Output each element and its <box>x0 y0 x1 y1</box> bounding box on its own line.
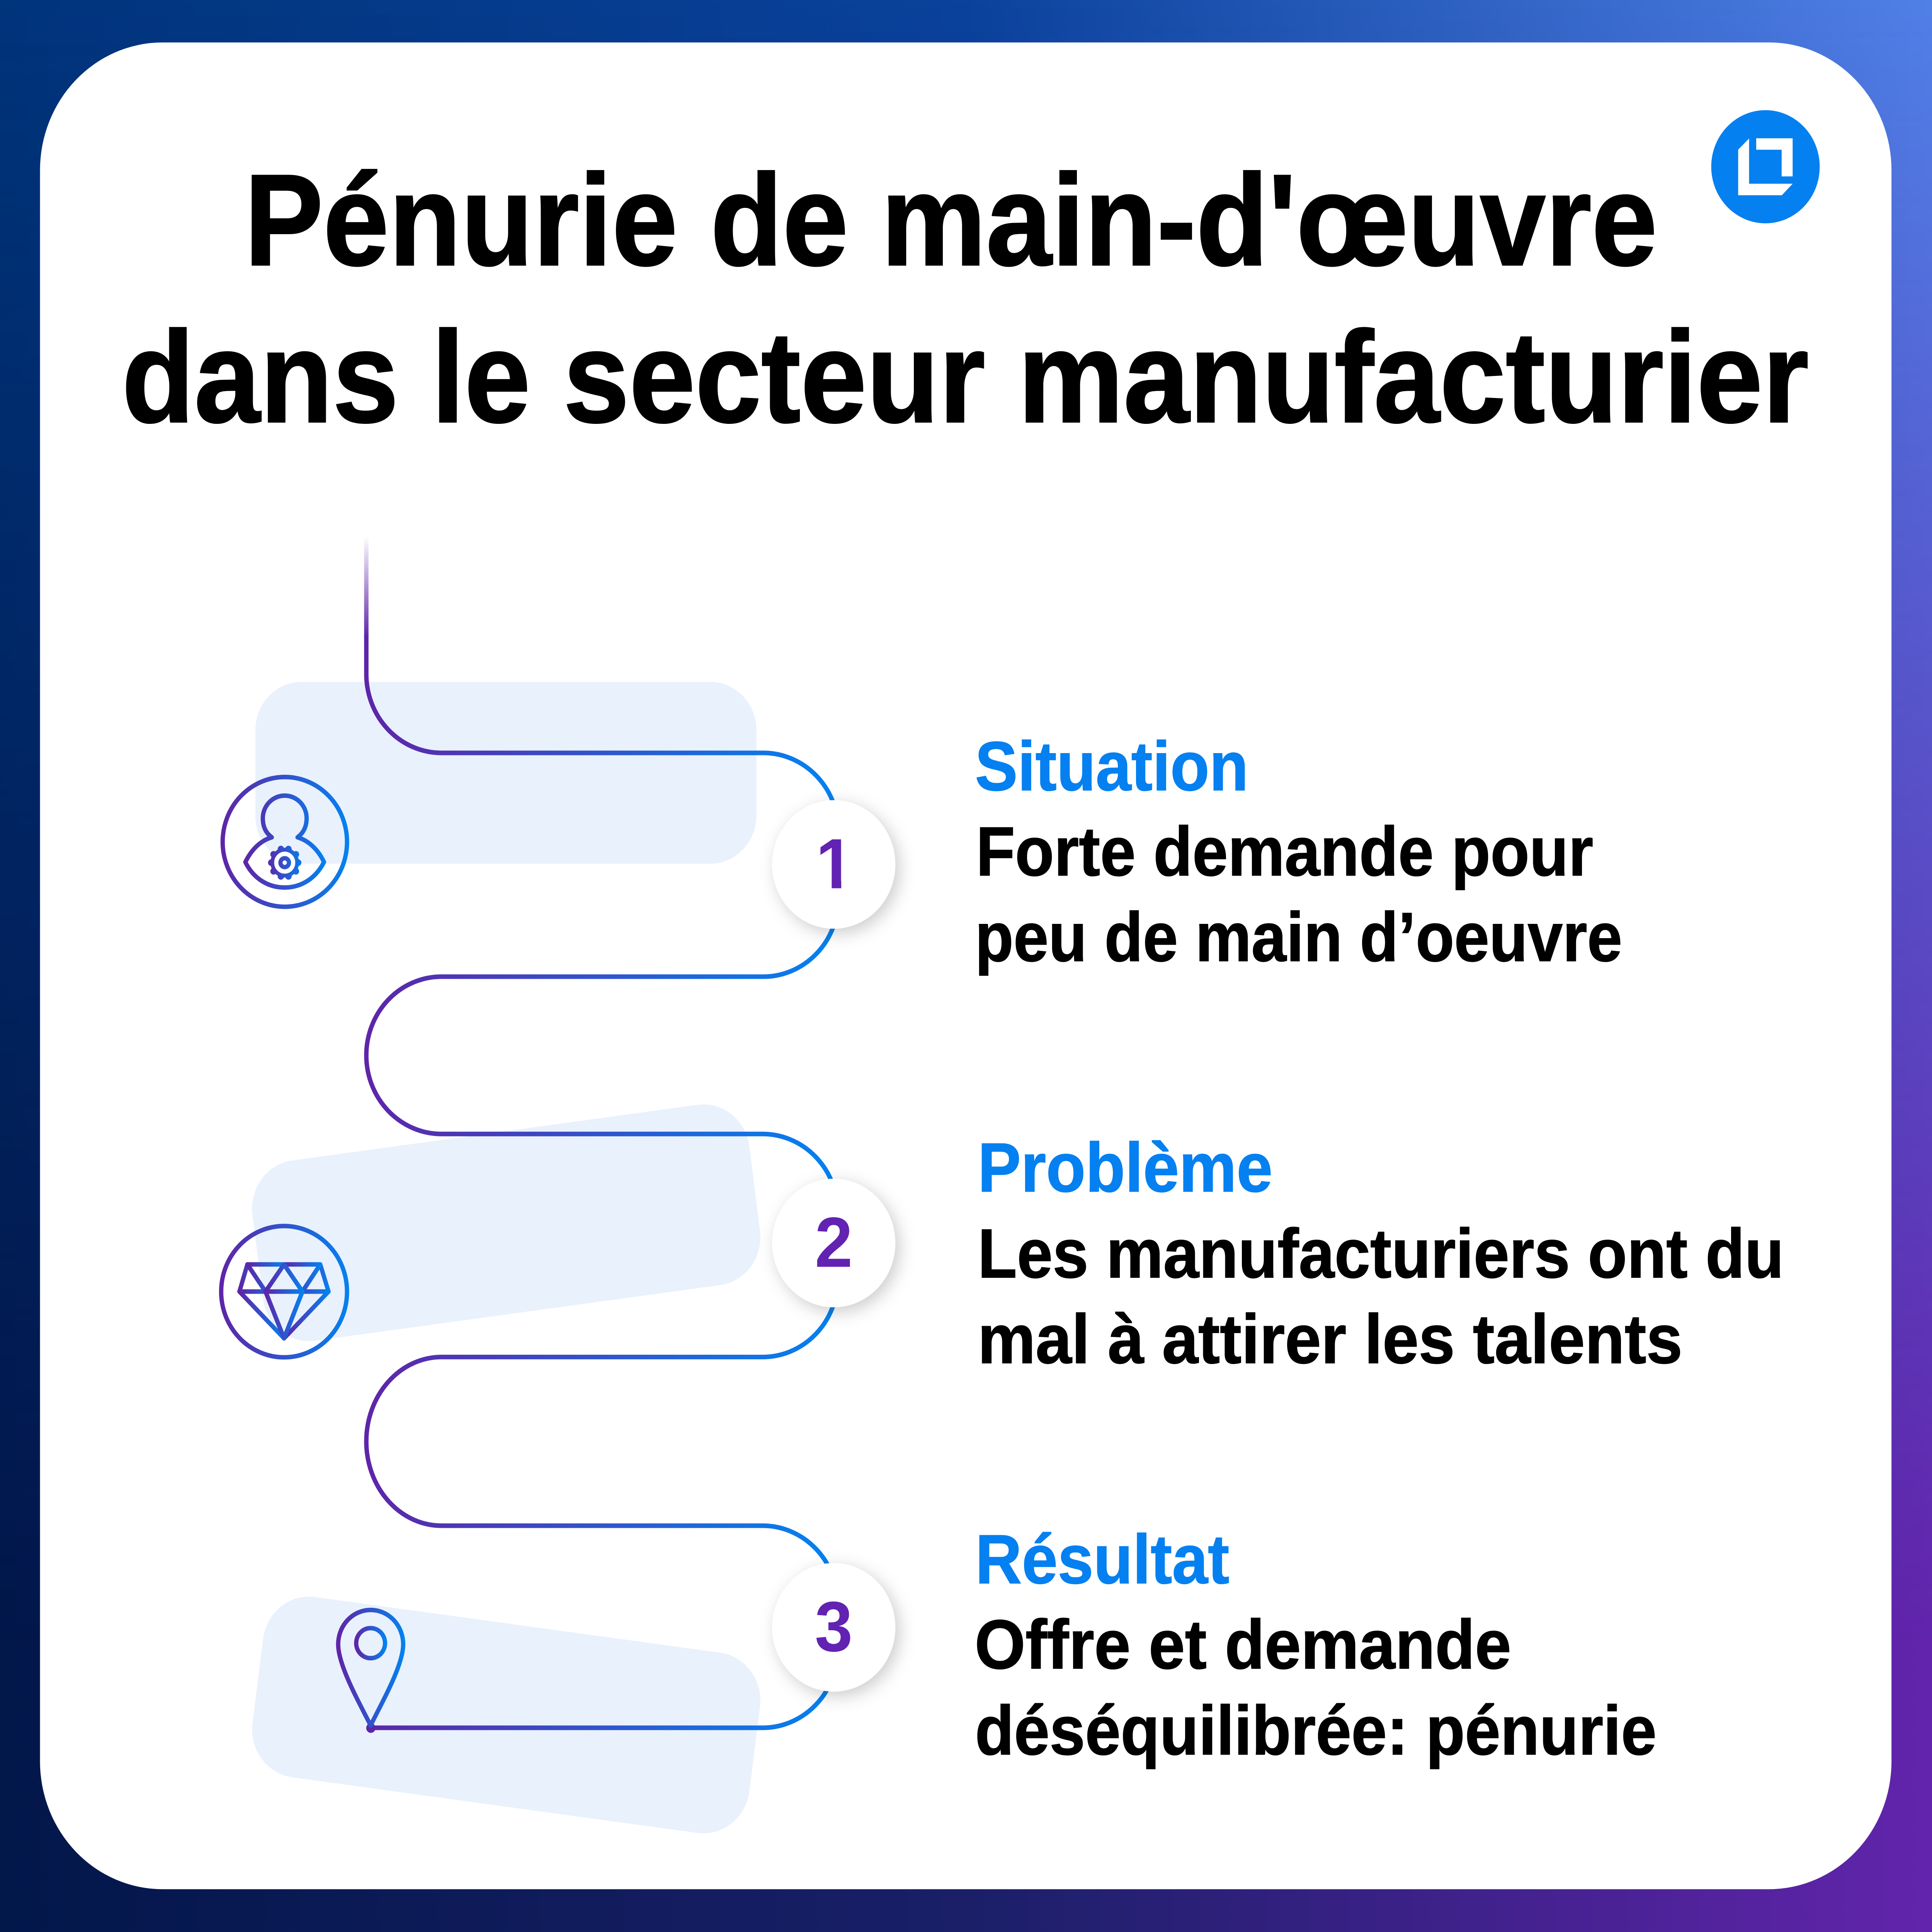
text block: problem <box>978 1129 1784 1378</box>
text block: situation: Forte demande pour <box>976 813 1593 890</box>
panel: situation backdrop <box>255 682 757 864</box>
number badge 1 <box>772 800 895 929</box>
number badge 1: 1 <box>816 824 854 904</box>
number badge 3 <box>772 1563 895 1692</box>
text block: situation <box>975 728 1622 976</box>
icon: person with eye and gear <box>223 777 347 907</box>
text block: problem: Les manufacturiers ont du <box>978 1215 1784 1293</box>
text block: result: Résultat <box>975 1520 1229 1598</box>
icon: map pin <box>338 1610 403 1733</box>
logo badge <box>1711 110 1820 223</box>
text block: situation: Situation <box>975 728 1248 805</box>
text block: problem: mal à attirer les talents <box>978 1300 1682 1378</box>
text block: result: déséquilibrée: pénurie <box>975 1692 1656 1769</box>
panel: problem backdrop <box>247 1099 766 1347</box>
title: dans le secteur manufacturier <box>122 304 1809 449</box>
text block: result <box>975 1520 1656 1769</box>
title: Pénurie de main-d'œuvre <box>245 147 1657 293</box>
text block: situation: peu de main d’oeuvre <box>975 898 1622 976</box>
icon: diamond <box>221 1226 347 1357</box>
number badge 2: 2 <box>815 1203 853 1282</box>
text block: problem: Problème <box>978 1129 1272 1206</box>
number badge 2 <box>772 1179 895 1307</box>
text block: result: Offre et demande <box>975 1606 1511 1684</box>
icon: gear <box>268 846 301 880</box>
winding route line <box>366 636 838 1728</box>
fading top of route line <box>364 536 369 638</box>
title <box>122 147 1809 449</box>
number badge 3: 3 <box>815 1587 853 1667</box>
panel: result backdrop <box>247 1591 766 1839</box>
